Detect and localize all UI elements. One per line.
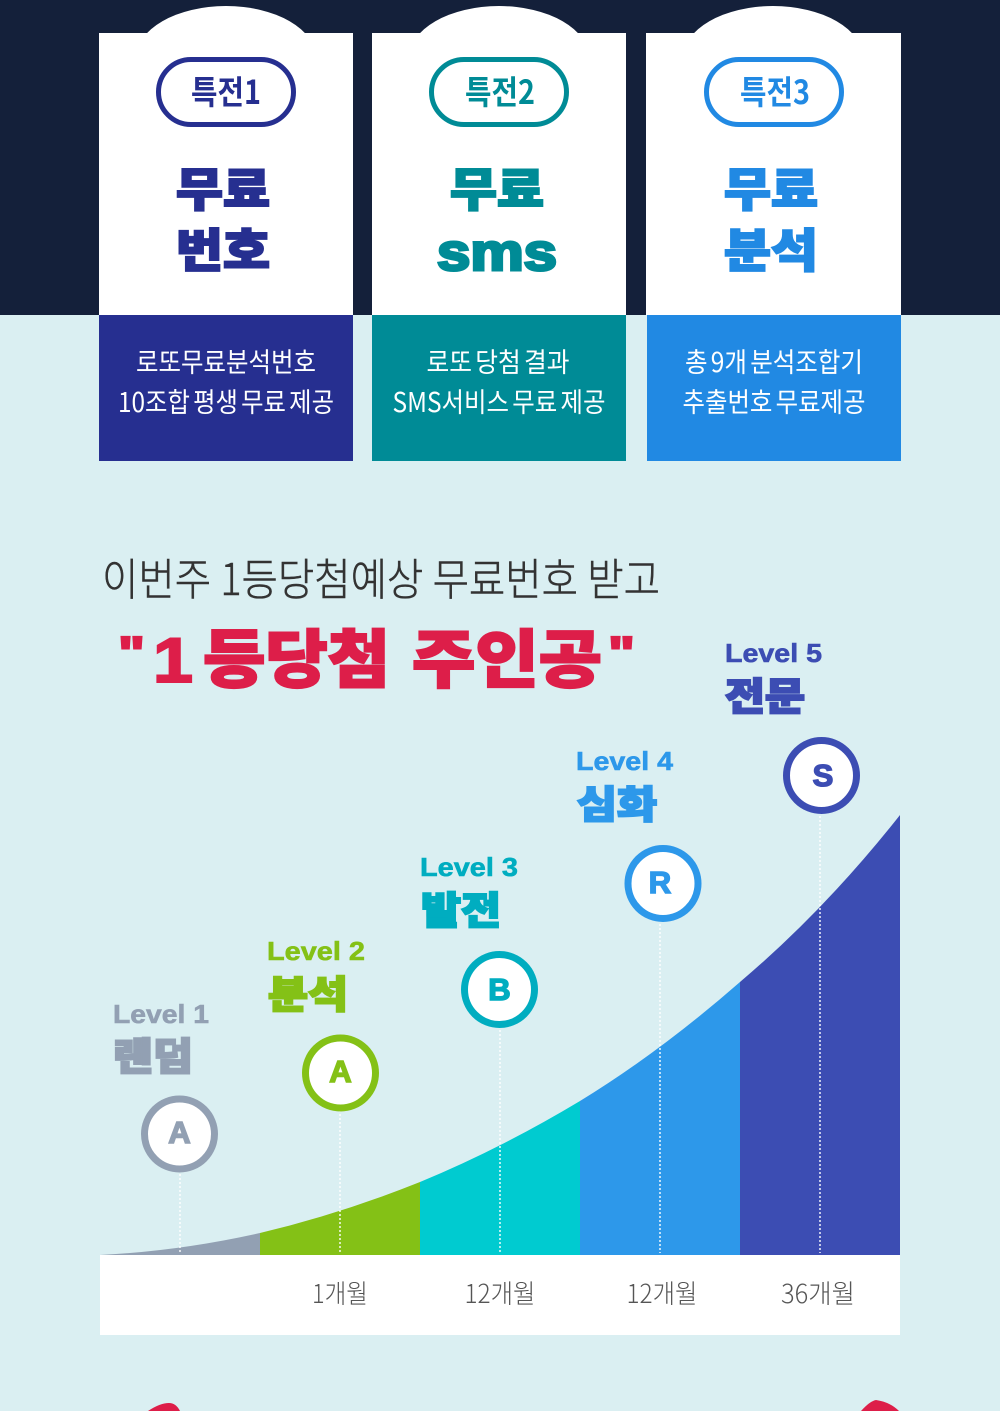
level 4 marker bbox=[576, 746, 698, 918]
decoration: left red shape bbox=[148, 1403, 180, 1411]
description: benefit 3: 총 9개 분석조합기 bbox=[685, 341, 863, 380]
panel: benefit 2 bbox=[372, 6, 626, 461]
level 2 marker: 분석 bbox=[268, 964, 348, 1019]
level 4 marker: R bbox=[649, 865, 671, 900]
description: benefit 2 bbox=[372, 315, 626, 461]
timeline axis: 1개월 bbox=[312, 1274, 368, 1311]
subtitle: 이번주 1등당첨예상 무료번호 받고 bbox=[102, 544, 660, 608]
badge: benefit 1 bbox=[158, 60, 294, 124]
timeline axis bbox=[100, 1255, 900, 1335]
title: " bbox=[608, 627, 635, 679]
badge: benefit 2 bbox=[432, 60, 566, 124]
timeline axis: 12개월 bbox=[464, 1274, 536, 1311]
heading: free analysis: 무료 bbox=[724, 164, 818, 216]
level 5 marker bbox=[725, 638, 856, 810]
level 4 marker: Level 4 bbox=[576, 746, 674, 776]
level 3 marker: 발전 bbox=[421, 880, 501, 935]
level 1 marker: 랜덤 bbox=[113, 1026, 193, 1081]
description: benefit 1 bbox=[99, 315, 353, 461]
level 3 marker bbox=[420, 852, 534, 1024]
level 4 marker: 심화 bbox=[577, 774, 657, 829]
timeline axis: 36개월 bbox=[781, 1274, 855, 1311]
panel: benefit 1 bbox=[99, 6, 353, 461]
chart segment: intensive bbox=[580, 982, 740, 1255]
description: benefit 1: 10조합 평생 무료 제공 bbox=[118, 381, 334, 420]
level 5 marker: Level 5 bbox=[725, 638, 822, 668]
badge: benefit 3: 특전3 bbox=[740, 66, 810, 114]
title: 1 bbox=[153, 626, 193, 696]
title: 주인공 bbox=[412, 626, 602, 696]
description: benefit 3 bbox=[647, 315, 901, 461]
level 1 marker bbox=[113, 999, 214, 1169]
heading: free sms: sms bbox=[437, 224, 557, 282]
area chart bbox=[100, 815, 900, 1255]
level 2 marker: A bbox=[329, 1054, 352, 1089]
title bbox=[118, 626, 635, 696]
decoration: right red shape bbox=[861, 1400, 899, 1411]
description: benefit 3: 추출번호 무료제공 bbox=[682, 381, 866, 420]
heading: free numbers: 번호 bbox=[176, 225, 270, 277]
heading: free sms bbox=[437, 164, 557, 282]
description: benefit 2: 로또 당첨 결과 bbox=[426, 341, 570, 380]
level 3 marker: B bbox=[488, 972, 511, 1007]
badge: benefit 1: 특전1 bbox=[191, 66, 261, 114]
badge: benefit 2: 특전2 bbox=[465, 66, 535, 114]
title: " bbox=[118, 627, 145, 679]
level 5 marker: 전문 bbox=[725, 666, 805, 721]
level 1 marker: A bbox=[168, 1115, 191, 1150]
heading: free sms: 무료 bbox=[450, 164, 544, 216]
level 2 marker bbox=[267, 936, 376, 1108]
chart segment: random bbox=[100, 1233, 260, 1255]
heading: free analysis: 분석 bbox=[724, 225, 818, 277]
level 3 marker: Level 3 bbox=[420, 852, 518, 882]
chart segment: analysis bbox=[260, 1182, 420, 1255]
level 5 marker: S bbox=[813, 758, 833, 793]
chart segment: expert bbox=[740, 815, 900, 1255]
description: benefit 1: 로또무료분석번호 bbox=[136, 341, 316, 380]
title: 등당첨 bbox=[203, 626, 390, 696]
heading: free numbers bbox=[176, 164, 270, 277]
level 2 marker: Level 2 bbox=[267, 936, 365, 966]
heading: free analysis bbox=[724, 164, 818, 277]
heading: free numbers: 무료 bbox=[176, 164, 270, 216]
description: benefit 2: SMS서비스 무료 제공 bbox=[392, 381, 606, 420]
badge: benefit 3 bbox=[706, 60, 842, 124]
chart segment: development bbox=[420, 1101, 580, 1255]
level 1 marker: Level 1 bbox=[113, 999, 209, 1029]
panel: benefit 3 bbox=[646, 6, 901, 461]
timeline axis: 12개월 bbox=[626, 1274, 698, 1311]
